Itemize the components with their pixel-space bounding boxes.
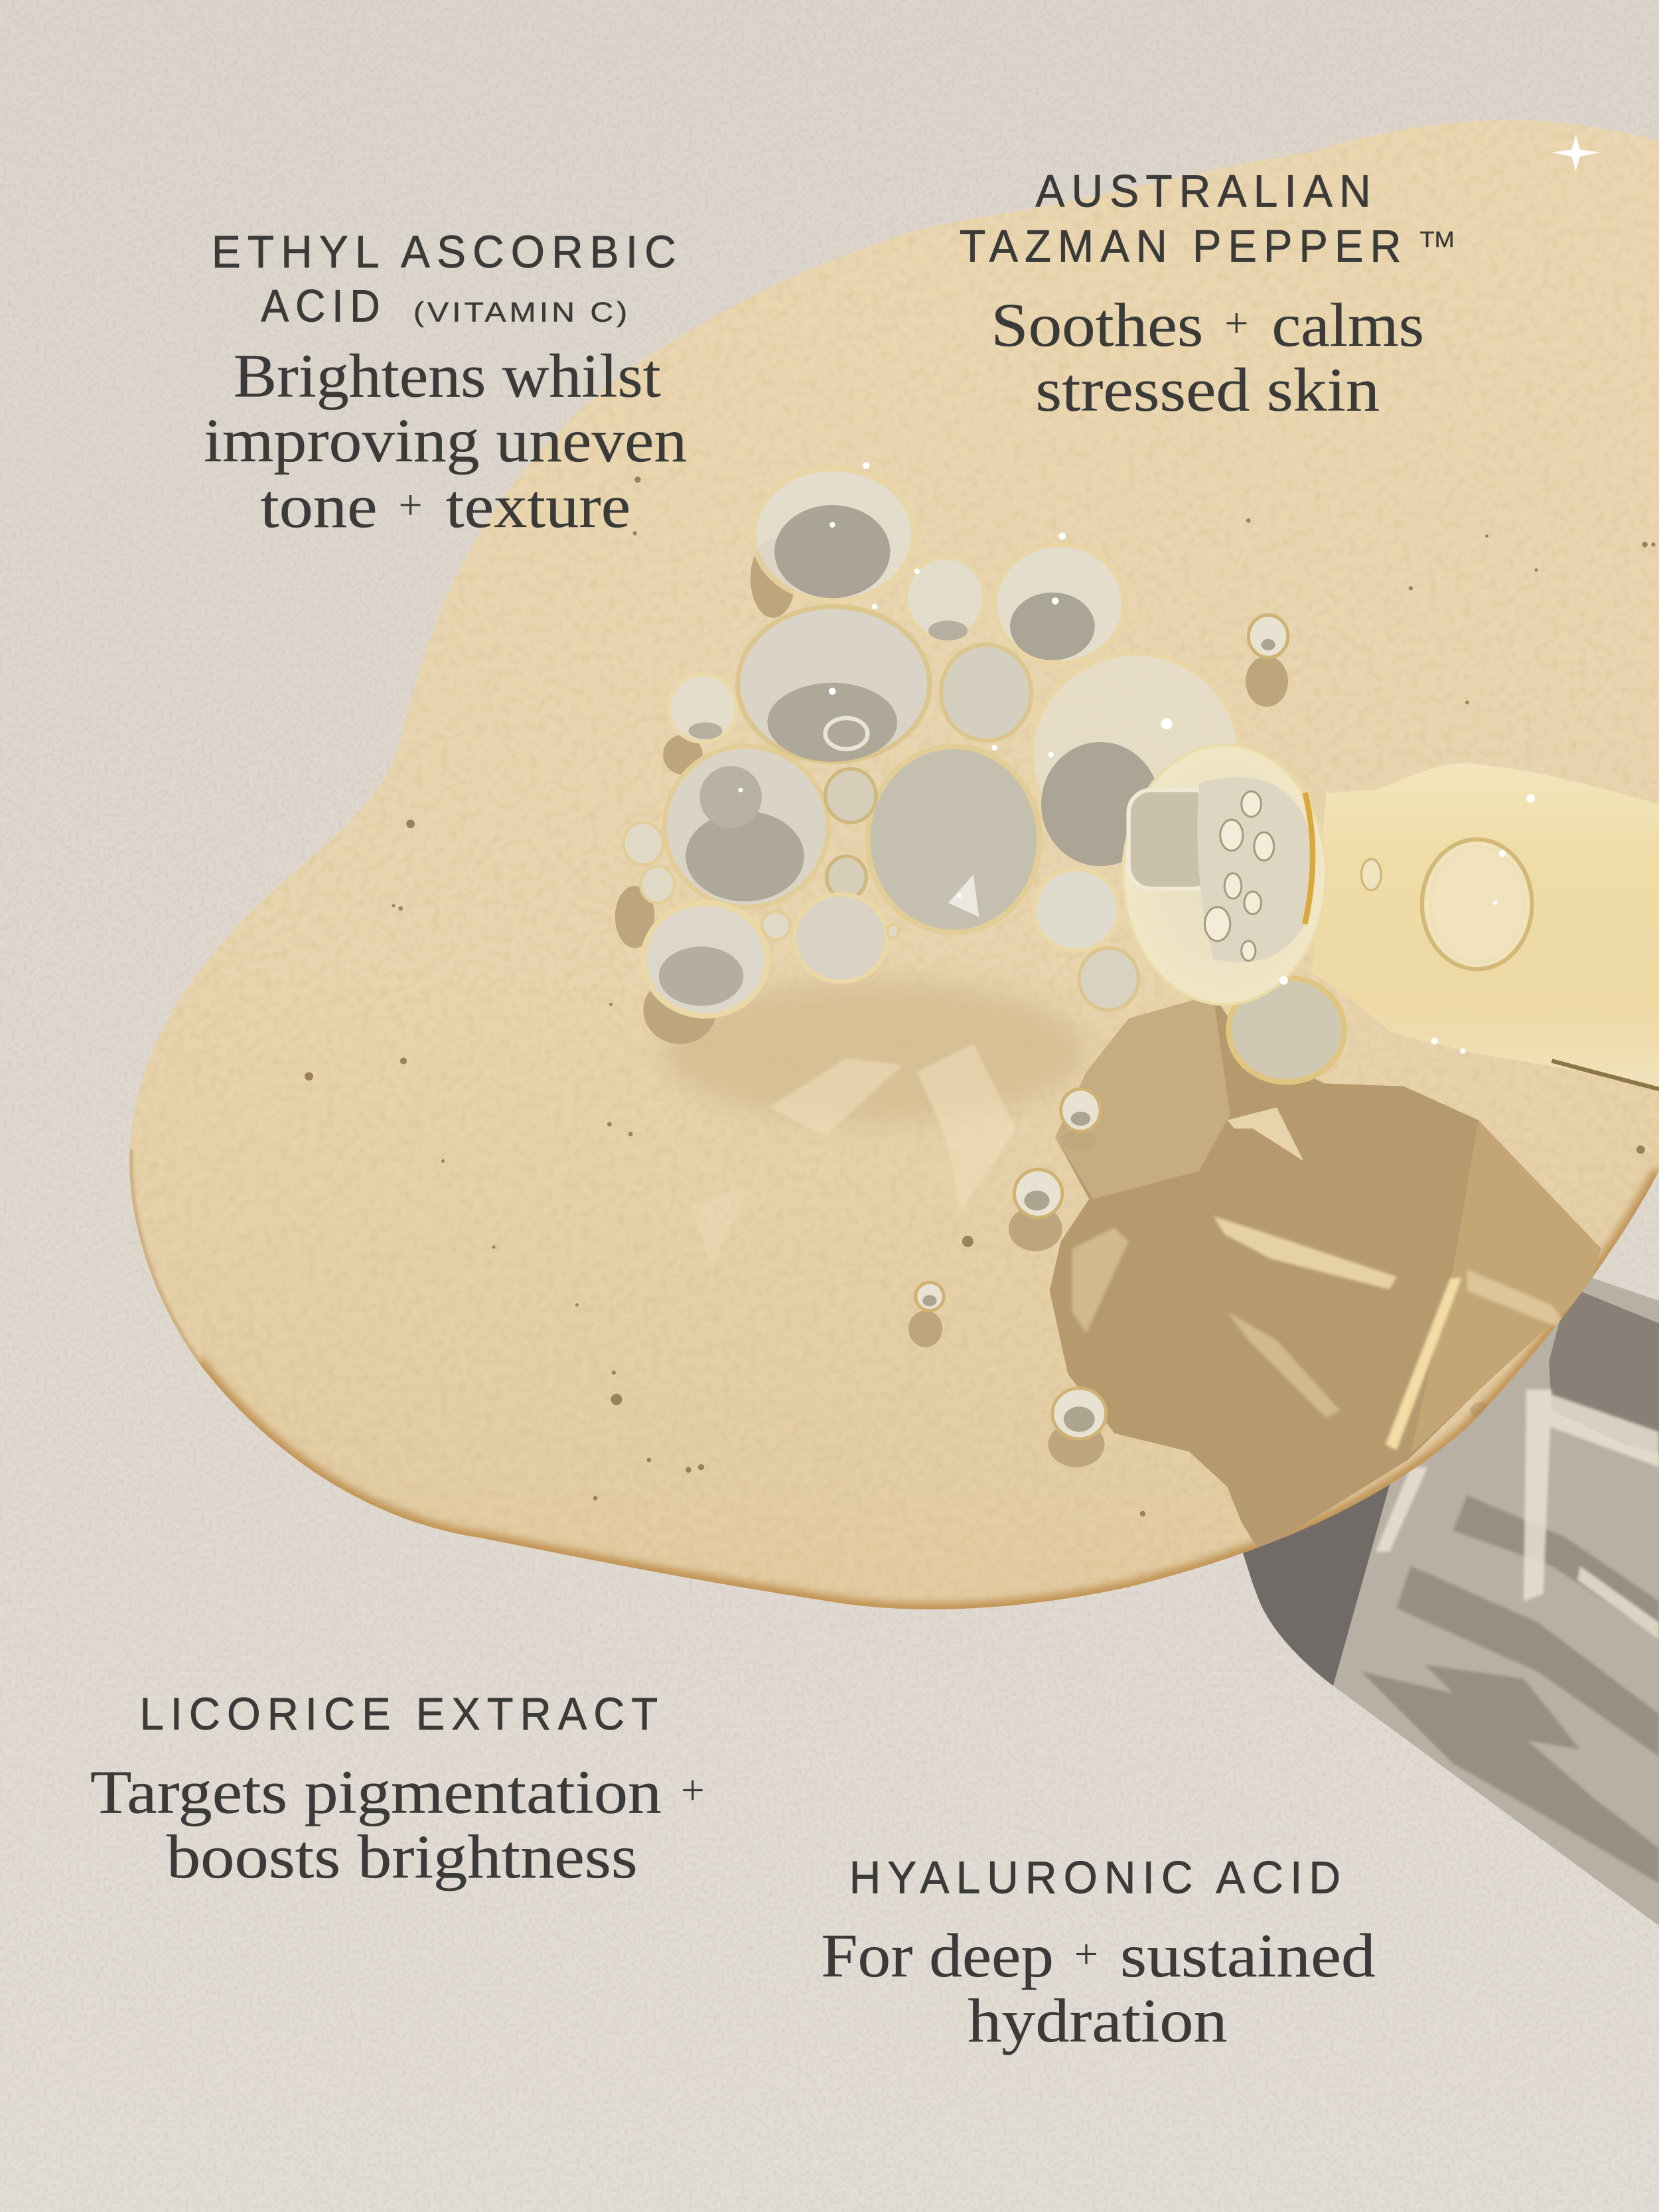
- heading: Licorice Extract: LICORICE EXTRACT: [139, 1688, 664, 1739]
- bubble M: [794, 895, 887, 982]
- bubble K: [827, 856, 866, 899]
- description: Australian Tazman Pepper: Soothes: [991, 291, 1203, 360]
- description: Ethyl Ascorbic Acid: tone: [260, 473, 378, 541]
- description: Ethyl Ascorbic Acid: improving uneven: [204, 407, 687, 475]
- bubble J: [826, 769, 876, 822]
- text: Hyaluronic Acid: [821, 1852, 1376, 2055]
- description: Licorice Extract: +: [681, 1767, 705, 1814]
- bubble E: [941, 644, 1031, 741]
- blob: shade under bubbles: [663, 980, 1086, 1122]
- text: Ethyl Ascorbic Acid: [204, 226, 687, 541]
- heading: Ethyl Ascorbic Acid: [212, 226, 683, 332]
- heading: Hyaluronic Acid: HYALURONIC ACID: [849, 1852, 1347, 1903]
- description: Licorice Extract: [90, 1758, 705, 1891]
- sparkles: [739, 135, 1600, 1054]
- description: Australian Tazman Pepper: +: [1224, 299, 1248, 346]
- shadow: dark part: [1242, 1453, 1427, 1686]
- bubble F: [669, 674, 737, 742]
- hand shadow on blob: [1050, 995, 1601, 1552]
- shadow: light rays: [1376, 1390, 1659, 1639]
- description: Australian Tazman Pepper: stressed skin: [1035, 356, 1380, 425]
- heading: Australian Tazman Pepper: TAZMAN PEPPER: [960, 220, 1408, 271]
- blob: warm lower edge: [198, 1171, 1659, 1609]
- description: Australian Tazman Pepper: [991, 291, 1424, 425]
- bubble shadows on serum: [615, 539, 1288, 1467]
- bubble: top A: [753, 469, 914, 601]
- light wedge on right of shadow: [1411, 1120, 1601, 1453]
- bubble below dropper: [1229, 978, 1344, 1082]
- bubble B: [906, 557, 985, 640]
- blob: leather grain: [113, 113, 1659, 1622]
- lit strip of hand shadow: [1227, 1108, 1303, 1161]
- description: Ethyl Ascorbic Acid: texture: [446, 473, 630, 541]
- specks in serum: [305, 477, 1656, 1516]
- dropper: [1123, 745, 1659, 1089]
- heading: Australian Tazman Pepper: TM: [1420, 227, 1455, 252]
- description: Ethyl Ascorbic Acid: Brightens whilst: [234, 342, 661, 410]
- dropper: bottom rim: [1551, 1061, 1659, 1089]
- bubble D: [738, 607, 930, 762]
- small edge bubbles: [624, 822, 899, 940]
- caustic streaks: [1072, 1216, 1573, 1450]
- dropper: rounded head: [1123, 745, 1326, 1004]
- bubble: large G behind dropper: [1031, 653, 1240, 866]
- dropper: bubble inside: [1422, 840, 1532, 969]
- bubble I: [867, 746, 1040, 932]
- bubble cluster: [624, 469, 1240, 1015]
- shadow: dark patch: [1549, 1287, 1659, 1453]
- serum blob: [113, 113, 1659, 1622]
- description: Australian Tazman Pepper: calms: [1271, 291, 1424, 360]
- description: Hyaluronic Acid: +: [1074, 1930, 1098, 1977]
- dropper: small bubble: [1361, 859, 1381, 890]
- loose bubbles: [916, 615, 1288, 1439]
- description: Hyaluronic Acid: hydration: [968, 1987, 1227, 2055]
- description: Ethyl Ascorbic Acid: [204, 342, 687, 541]
- heading: Australian Tazman Pepper: [960, 165, 1455, 271]
- heading: Australian Tazman Pepper: AUSTRALIAN: [1035, 165, 1378, 217]
- caustics under bubbles: [691, 1044, 1016, 1270]
- description: Hyaluronic Acid: For deep: [821, 1922, 1054, 1990]
- shadow of hand on paper: [1242, 1274, 1659, 1925]
- heading: Ethyl Ascorbic Acid: (VITAMIN C): [413, 297, 630, 328]
- upper lighter part of shadow: [1055, 995, 1230, 1199]
- bubble O: [1079, 948, 1139, 1010]
- description: Hyaluronic Acid: sustained: [1120, 1922, 1376, 1990]
- bubble C: [995, 544, 1124, 663]
- shadow: streaks: [1361, 1495, 1659, 1883]
- description: Ethyl Ascorbic Acid: +: [399, 481, 423, 528]
- text: Licorice Extract: [90, 1688, 705, 1891]
- bubble H: [664, 746, 828, 907]
- shadow: lit part: [1333, 1274, 1659, 1925]
- heading: Ethyl Ascorbic Acid: ETHYL ASCORBIC: [212, 226, 683, 277]
- heading: Ethyl Ascorbic Acid: ACID: [261, 280, 386, 332]
- description: Licorice Extract: Targets pigmentation: [90, 1758, 662, 1826]
- sparkle: top right flare: [1551, 135, 1600, 171]
- description: Licorice Extract: boosts brightness: [167, 1823, 638, 1891]
- description: Hyaluronic Acid: [821, 1922, 1376, 2055]
- bubble N: [1034, 869, 1119, 951]
- bubble L: [643, 903, 767, 1015]
- text: Australian Tazman Pepper: [960, 165, 1455, 425]
- shadow right of drop on right edge: [1470, 1402, 1492, 1419]
- dropper: glass body: [1312, 763, 1659, 1089]
